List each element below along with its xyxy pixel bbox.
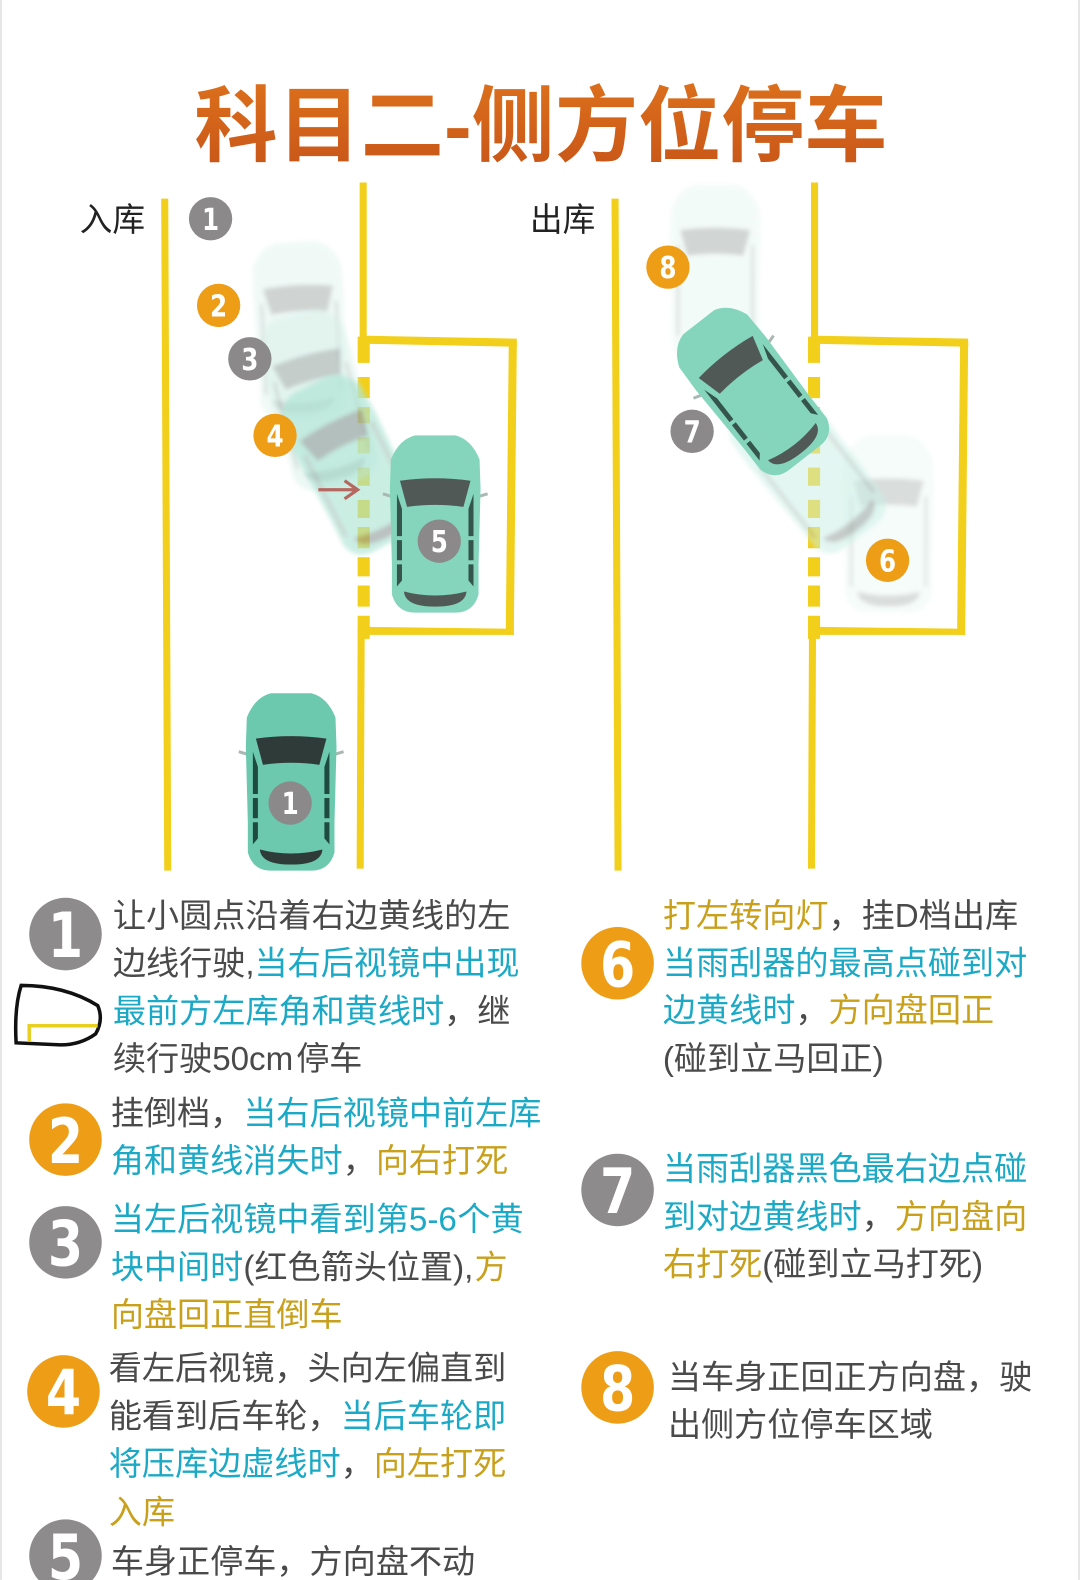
lane lines [612,182,968,871]
badge 5 [29,1519,102,1580]
text step 1: ，继 [444,994,510,1031]
step 2 [29,1095,541,1180]
text step 3: 方 [475,1250,508,1287]
step 5 [29,1519,475,1580]
text step 6: (碰到立马回正) [663,1041,884,1078]
step markers [646,245,909,582]
text step 7: (碰到立马打死) [762,1247,983,1284]
step markers: 1 [282,787,299,822]
badge 2 [29,1103,102,1178]
text step 2: ，向右打死 [343,1143,508,1180]
badge 3 [29,1206,102,1281]
step markers: 4 [266,419,284,454]
text step 4: 入库 [109,1494,175,1531]
badge 7 [581,1154,654,1228]
badge 4 [27,1355,100,1430]
badge 7: 7 [600,1155,635,1228]
step 3 [29,1201,524,1334]
step 6 [581,898,1027,1078]
step 4 [27,1350,506,1531]
text step 8: 出侧方位停车区域 [668,1407,933,1444]
badge 3: 3 [48,1208,83,1281]
text step 7: ，方向盘向 [862,1199,1027,1236]
ghost car positions [670,185,934,613]
text step 4: 能看到后车轮， [109,1399,341,1436]
text step 4: 看左后视镜，头向左偏直到 [109,1350,506,1387]
panel: entering parking diagram [80,182,517,871]
step markers: 2 [210,289,227,324]
text step 1: 最前方左库角和黄线时 [113,994,444,1031]
badge 4: 4 [46,1357,81,1430]
step markers: 1 [202,203,219,238]
step markers: 8 [659,251,677,286]
text step 1: 当右后视镜中出现 [255,945,520,982]
badge 6: 6 [600,928,635,1001]
text step 1: 续行驶50cm [113,1041,293,1078]
label: entering: 入库 [80,201,145,238]
text step 1: 让小圆点沿着右边黄线的左 [113,898,510,935]
badge 6 [581,927,654,1001]
badge 1 [29,898,102,972]
text step 6: 当雨刮器的最高点碰到对 [663,945,1027,982]
text step 2: 当右后视镜中前左库 [243,1095,541,1132]
text step 2: 角和黄线消失时 [111,1143,343,1180]
badge 2: 2 [48,1105,83,1178]
text step 3: (红色箭头位置), [243,1250,473,1287]
text step 3: 向盘回正直倒车 [111,1297,343,1334]
label: exiting: 出库 [530,201,595,238]
arrow: red pointer [318,481,358,499]
text step 1: 停车 [296,1041,362,1078]
text step 1: 边线行驶, [113,945,255,982]
step 1 [16,898,520,1078]
text step 8: 当车身正回正方向盘，驶 [668,1359,1032,1396]
text step 3: 块中间时 [111,1250,243,1287]
text step 7: 当雨刮器黑色最右边点碰 [663,1151,1027,1188]
badge 1: 1 [48,899,83,972]
text step 3: 个黄 [457,1201,524,1238]
car 5 [383,435,488,613]
text step 5: 车身正停车，方向盘不动 [111,1544,475,1580]
ghost car positions [250,240,431,563]
text step 7: 右打死 [663,1247,762,1284]
text step 6: ，方向盘回正 [795,993,994,1030]
text step 6: ，挂D档出库 [829,898,1018,935]
text step 2: 挂倒档， [111,1095,243,1132]
icon: rear-view mirror [16,985,100,1045]
panel: exiting parking diagram [530,182,968,871]
step 7 [581,1151,1027,1284]
text step 7: 到对边黄线时 [663,1199,862,1236]
step 8 [581,1351,1032,1444]
step markers [189,197,461,825]
text step 6: 边黄线时 [663,993,795,1030]
title: 科目二-侧方位停车 [194,79,888,172]
step markers: 5 [431,525,448,560]
text step 4: 当后车轮即 [341,1399,506,1436]
car 7 [659,291,845,489]
text step 4: ，向左打死 [341,1446,506,1483]
text step 6: 打左转向灯 [663,898,829,935]
text step 3: 当左后视镜中看到第5-6 [111,1201,457,1238]
lane lines [161,182,517,871]
step markers: 3 [241,343,258,378]
step markers: 7 [684,415,701,450]
car 1 [239,693,344,871]
step markers: 6 [879,544,896,579]
text step 4: 将压库边虚线时 [109,1446,341,1483]
badge 8 [581,1351,654,1426]
badge 8: 8 [600,1353,635,1426]
